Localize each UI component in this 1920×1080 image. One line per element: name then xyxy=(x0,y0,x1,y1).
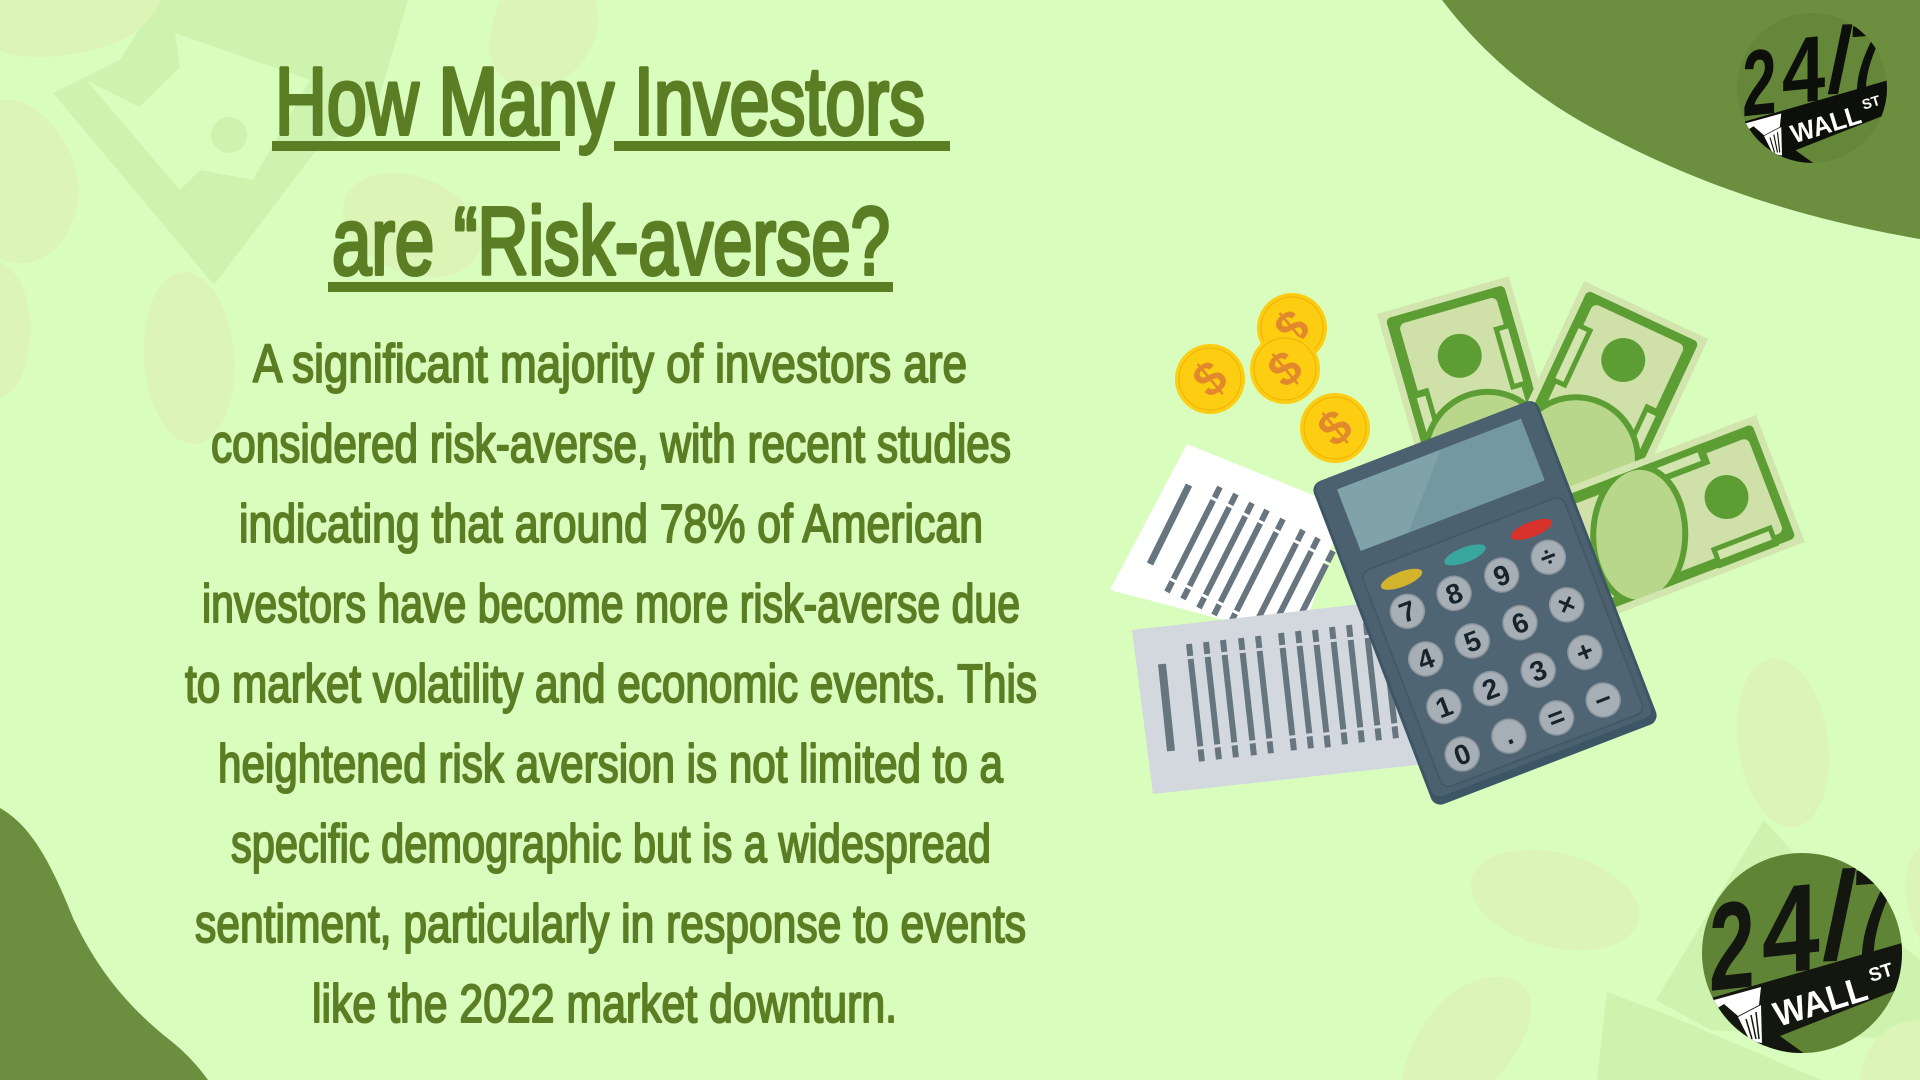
coin xyxy=(1300,393,1370,463)
keypad: 3 xyxy=(1526,654,1551,688)
keypad: . xyxy=(1499,719,1518,751)
title xyxy=(272,48,950,295)
body paragraph: to market volatility and economic events. This xyxy=(185,654,1037,714)
faded background pattern: bottom right xyxy=(1402,653,1920,1080)
logo: top right: / xyxy=(1826,8,1854,113)
logo: top right: 2 xyxy=(1742,29,1777,137)
keypad: 0 xyxy=(1450,737,1475,772)
body paragraph: heightened risk aversion is not limited to a xyxy=(218,734,1004,794)
keypad: 4 xyxy=(1413,642,1439,677)
keypad: 1 xyxy=(1431,690,1457,724)
body paragraph: investors have become more risk-averse due xyxy=(202,574,1020,634)
keypad: 6 xyxy=(1507,606,1533,640)
logo: top right xyxy=(1739,18,1887,163)
coin xyxy=(1250,334,1320,404)
calculator screen xyxy=(1337,419,1545,551)
keypad: = xyxy=(1543,700,1570,735)
keypad: 5 xyxy=(1460,624,1485,659)
coin: $ xyxy=(1308,399,1363,457)
corner blob: top right xyxy=(1442,0,1920,239)
keypad: 9 xyxy=(1489,558,1515,593)
calculator xyxy=(1311,398,1660,808)
keypad: 8 xyxy=(1441,577,1467,611)
coin: $ xyxy=(1258,340,1313,398)
title: are “Risk-averse? xyxy=(332,188,890,295)
keypad: − xyxy=(1590,682,1616,717)
keypad: × xyxy=(1553,587,1580,622)
white receipt xyxy=(1110,444,1345,656)
body paragraph: sentiment, particularly in response to events xyxy=(195,894,1026,954)
keypad: ÷ xyxy=(1535,539,1561,574)
logo: bottom right: 4 xyxy=(1762,857,1820,1002)
logo: bottom right: / xyxy=(1821,847,1858,986)
banknote: lower right xyxy=(1570,415,1805,614)
logo: top right: WALL xyxy=(1787,99,1865,149)
body paragraph: indicating that around 78% of American xyxy=(239,494,983,554)
keypad: 2 xyxy=(1478,672,1504,706)
body paragraph: specific demographic but is a widespread xyxy=(231,814,991,874)
illustration: money and calculator xyxy=(1110,276,1810,808)
logo: bottom right xyxy=(1702,842,1902,1057)
body paragraph: like the 2022 market downturn. xyxy=(312,974,897,1034)
logo: bottom right: WALL xyxy=(1769,969,1872,1035)
coin xyxy=(1257,293,1327,363)
logo: top right: 4 xyxy=(1782,16,1825,125)
body paragraph: A significant majority of investors are xyxy=(253,334,967,394)
banknote: upper left xyxy=(1377,276,1538,444)
logo: top right: ST xyxy=(1860,93,1883,114)
coin: $ xyxy=(1183,350,1238,408)
corner blob: bottom left xyxy=(0,808,208,1080)
coin: $ xyxy=(1265,299,1320,357)
grey receipt xyxy=(1132,603,1425,794)
logo: bottom right: 2 xyxy=(1709,874,1755,1018)
banknote: upper right xyxy=(1528,281,1708,486)
faded background pattern: top left xyxy=(0,0,598,447)
keypad: 7 xyxy=(1395,594,1420,629)
body paragraph: considered risk-averse, with recent studies xyxy=(211,414,1011,474)
logo: top right: 7 xyxy=(1847,4,1885,111)
keypad: + xyxy=(1572,635,1598,669)
title: How Many Investors xyxy=(275,48,925,155)
coin xyxy=(1175,344,1245,414)
keypad xyxy=(1360,495,1645,789)
body paragraph xyxy=(185,334,1037,1034)
logo: bottom right: ST xyxy=(1866,959,1896,987)
